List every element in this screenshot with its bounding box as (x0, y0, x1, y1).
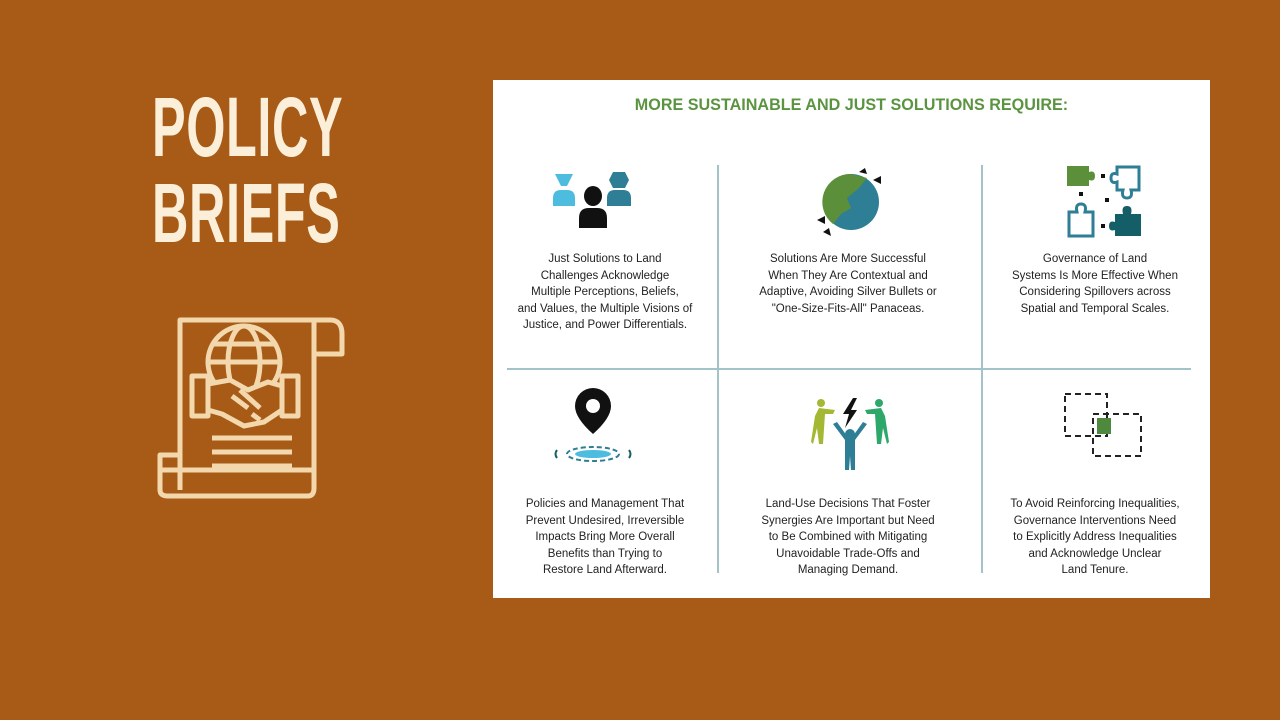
text 4: Policies and Management That (526, 498, 684, 510)
text 3 (1012, 253, 1178, 314)
title: POLICY (152, 80, 343, 174)
text 6: To Avoid Reinforcing Inequalities, (1010, 498, 1180, 510)
text 6 (1010, 498, 1180, 576)
text 5 (761, 498, 935, 576)
text 2 (759, 253, 937, 314)
text 2: Adaptive, Avoiding Silver Bullets or (759, 286, 937, 298)
text 1: and Values, the Multiple Visions of (518, 302, 692, 314)
text 1: Challenges Acknowledge (541, 270, 669, 282)
text 4 (526, 498, 684, 576)
text 4: Benefits than Trying to (548, 548, 662, 560)
text 5: Land-Use Decisions That Foster (766, 498, 930, 510)
icon: puzzle (1067, 166, 1141, 238)
icon: overlapping squares (1064, 393, 1142, 457)
text 1: Multiple Perceptions, Beliefs, (531, 286, 679, 298)
text 5: to Be Combined with Mitigating (769, 531, 927, 543)
icon: location pin (554, 388, 632, 462)
icon: people with conflict (811, 398, 889, 470)
text 2: "One-Size-Fits-All" Panaceas. (772, 302, 924, 314)
text 5: Unavoidable Trade-Offs and (776, 548, 920, 560)
heading: MORE SUSTAINABLE AND JUST SOLUTIONS REQUIRE: (635, 95, 1068, 114)
text 3: Systems Is More Effective When (1012, 270, 1178, 282)
text 1: Justice, and Power Differentials. (523, 319, 687, 331)
text 3: Governance of Land (1043, 253, 1147, 265)
text 6: Governance Interventions Need (1014, 514, 1176, 526)
text 3: Considering Spillovers across (1019, 286, 1171, 298)
panel: solutions (493, 80, 1210, 598)
text 6: Land Tenure. (1062, 564, 1128, 576)
text 3: Spatial and Temporal Scales. (1021, 302, 1169, 314)
icon: people (553, 172, 631, 228)
title: BRIEFS (152, 166, 340, 260)
icon: policy scroll with handshake (158, 318, 344, 498)
text 2: Solutions Are More Successful (770, 253, 926, 265)
text 1 (518, 253, 692, 331)
text 6: to Explicitly Address Inequalities (1013, 531, 1177, 543)
text 4: Restore Land Afterward. (543, 564, 667, 576)
text 5: Managing Demand. (798, 564, 898, 576)
text 4: Prevent Undesired, Irreversible (526, 514, 684, 526)
text 5: Synergies Are Important but Need (761, 514, 935, 526)
icon: globe (817, 168, 881, 236)
text 4: Impacts Bring More Overall (535, 531, 675, 543)
text 6: and Acknowledge Unclear (1028, 548, 1161, 560)
text 2: When They Are Contextual and (768, 270, 928, 282)
text 1: Just Solutions to Land (548, 253, 662, 265)
title (152, 80, 343, 260)
